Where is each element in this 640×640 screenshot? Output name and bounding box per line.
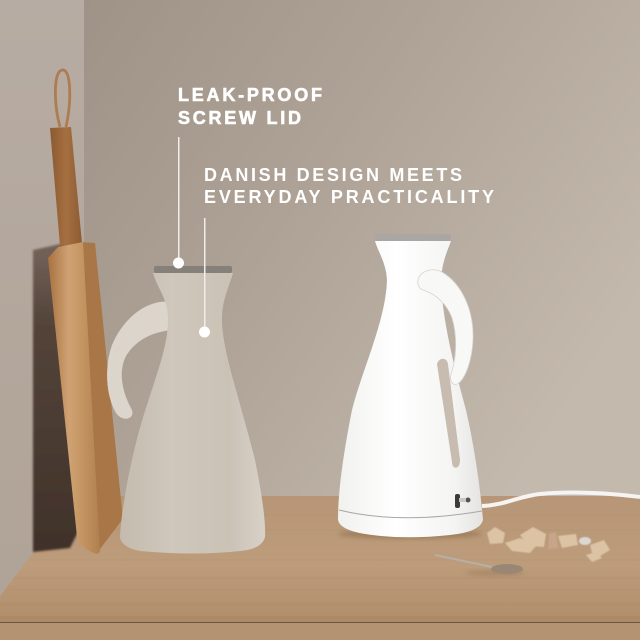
sugar crumbs — [487, 527, 610, 562]
kettle handle — [418, 270, 473, 384]
callout: leak-proof screw lid — [173, 85, 330, 268]
wooden shelf — [0, 496, 640, 640]
callout: Danish design — [199, 165, 494, 338]
power switch — [455, 494, 470, 508]
flask body — [120, 273, 265, 554]
marker dot — [173, 258, 184, 268]
cutting board — [48, 70, 122, 554]
flask lid — [154, 266, 232, 273]
base seam — [339, 510, 482, 518]
front board — [48, 242, 100, 554]
heading: SCREW LID — [178, 108, 301, 128]
spoon — [435, 555, 525, 576]
white electric kettle — [338, 234, 640, 539]
shadow of board on wall — [33, 244, 84, 552]
kettle shadow — [338, 529, 482, 539]
leader line — [204, 218, 206, 330]
back wall — [84, 0, 640, 500]
flask handle — [107, 301, 172, 419]
kettle body — [338, 241, 483, 537]
heading: DANISH DESIGN MEETS — [204, 165, 462, 185]
hanging loop — [55, 70, 70, 127]
water window — [437, 359, 460, 468]
left side wall — [0, 0, 84, 596]
marker dot — [199, 326, 210, 338]
heading: LEAK-PROOF — [178, 85, 322, 105]
cable — [482, 493, 640, 506]
heading: EVERYDAY PRACTICALITY — [204, 187, 494, 207]
sand thermos flask — [107, 266, 265, 554]
board handle — [50, 127, 82, 246]
rear board — [80, 242, 122, 553]
leader line — [178, 137, 180, 263]
kettle lid — [375, 234, 451, 241]
